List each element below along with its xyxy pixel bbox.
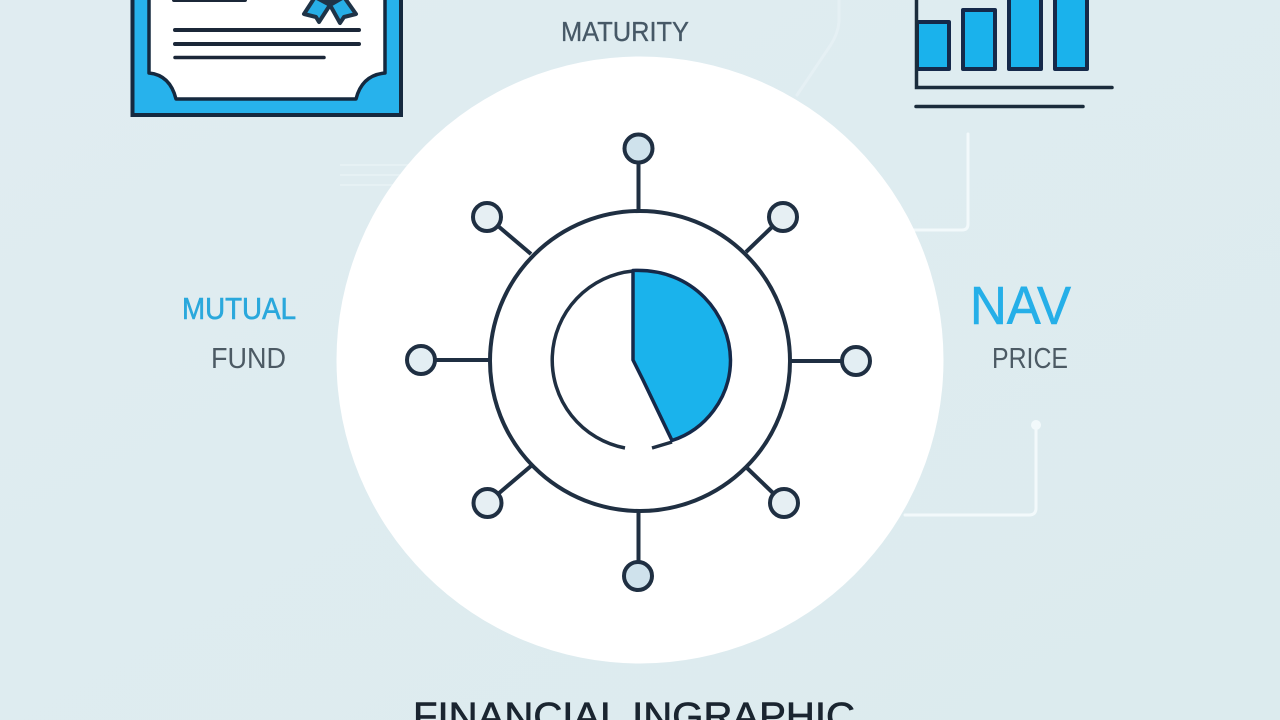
label: mutual: MUTUAL [182,291,296,326]
nodes [407,134,870,590]
diagram: hub and spoke [407,134,870,590]
icon: certificate ribbon seal [304,0,356,23]
certificate text lines [174,0,359,58]
label: fund: FUND [211,343,286,375]
bars [917,0,1087,69]
panel: central white circle [336,56,944,664]
connector: top right curved line [797,0,839,95]
connector: price to circle [905,420,1041,515]
label: maturity: MATURITY [561,16,689,47]
label: NAV: NAV [970,276,1071,336]
icon: certificate [132,0,401,115]
spokes [435,162,842,562]
connector: faint lines left of the circle [340,165,410,185]
pie slice [633,270,730,440]
baseline rule [916,105,1083,108]
axes [916,0,1112,88]
inner pie outline [552,271,672,448]
label: price: PRICE [992,343,1068,375]
outer ring [490,211,790,511]
icon: bar chart [916,0,1112,106]
connector: chart to circle [905,134,968,230]
